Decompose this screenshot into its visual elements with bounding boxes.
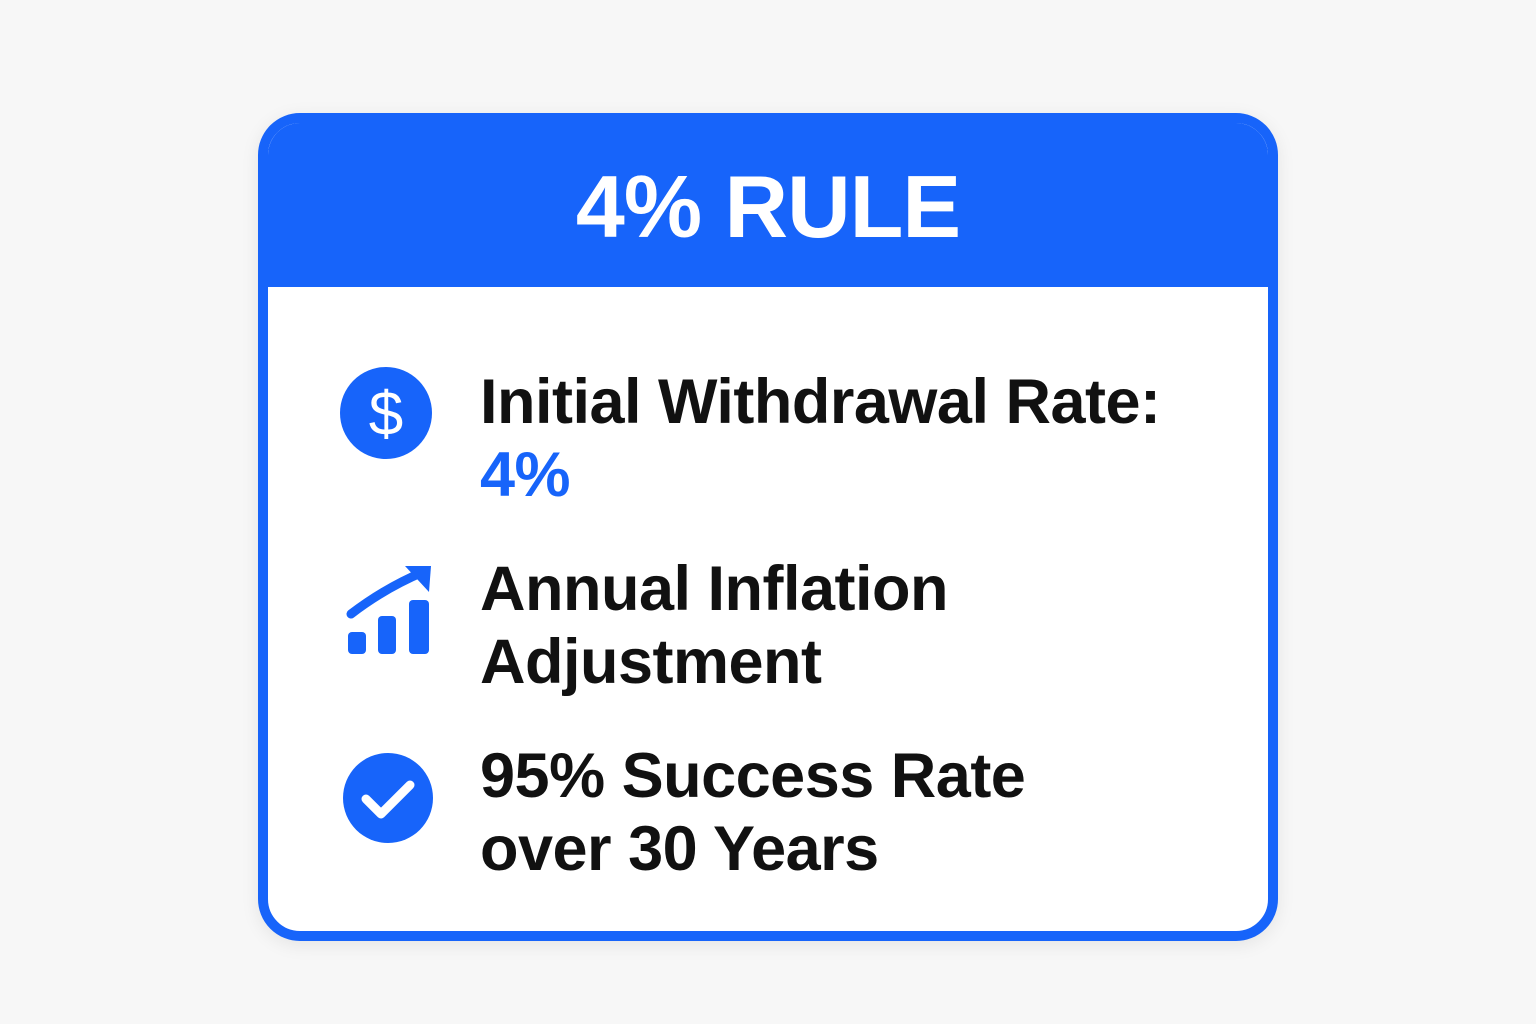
title: 4% RULE — [576, 157, 960, 256]
card — [258, 113, 1278, 941]
text: success rate: 95% Success Rate — [480, 741, 1025, 811]
text: inflation — [480, 554, 948, 697]
icon: dollar: $ — [369, 380, 403, 449]
header band — [268, 123, 1268, 287]
text: inflation: Adjustment — [480, 627, 822, 697]
text: withdrawal rate: 4% — [480, 440, 570, 510]
icon: growth chart — [346, 566, 431, 654]
text: success rate — [480, 741, 1025, 884]
text: inflation: Annual Inflation — [480, 554, 948, 624]
icon: check — [343, 753, 433, 843]
text: withdrawal rate: Initial Withdrawal Rate: — [480, 367, 1161, 437]
text: success rate: over 30 Years — [480, 814, 879, 884]
icon: dollar — [340, 367, 432, 459]
text: withdrawal rate — [480, 367, 1161, 510]
